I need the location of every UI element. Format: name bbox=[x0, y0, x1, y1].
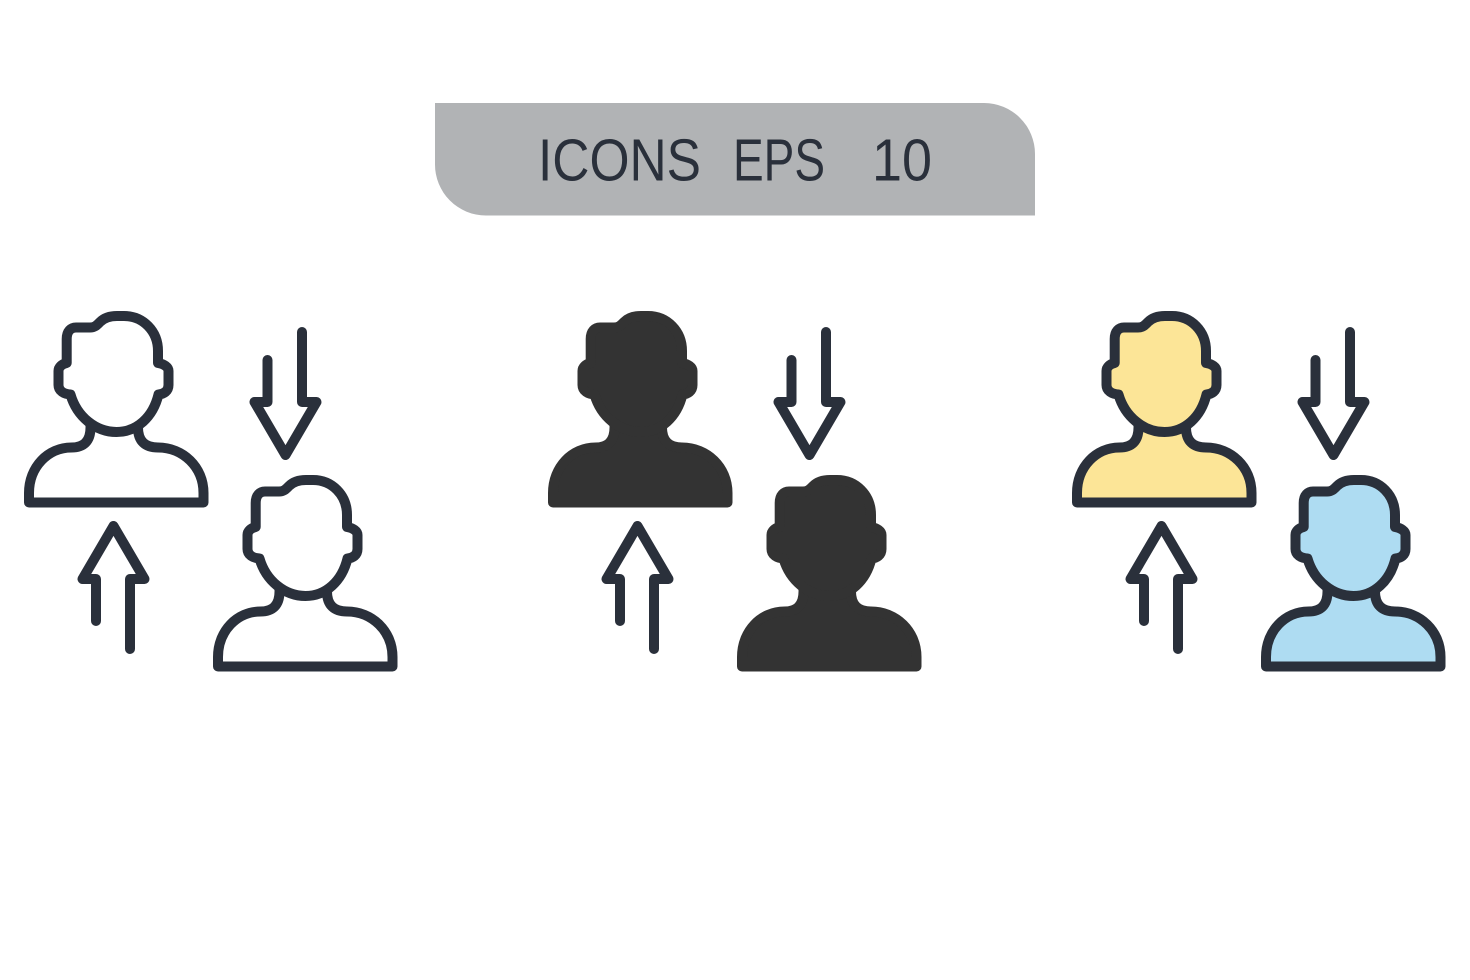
outline arrow up bbox=[82, 526, 144, 649]
outline arrow down bbox=[254, 332, 316, 455]
banner background bbox=[435, 103, 1035, 216]
icon: colour exchange bbox=[1077, 316, 1440, 666]
colour arrow down bbox=[1302, 332, 1364, 455]
icon: solid exchange bbox=[553, 316, 916, 666]
solid person left bbox=[553, 316, 728, 502]
blue person bbox=[1266, 480, 1440, 666]
solid arrow down bbox=[778, 332, 840, 455]
banner bbox=[435, 103, 1035, 216]
banner title bbox=[538, 128, 932, 194]
solid person right bbox=[742, 480, 916, 666]
outline person right bbox=[218, 480, 392, 666]
icon: outline exchange bbox=[29, 316, 392, 666]
banner title: ICONS bbox=[538, 128, 701, 194]
colour arrow up bbox=[1130, 526, 1192, 649]
yellow person bbox=[1077, 316, 1252, 502]
banner title: 10 bbox=[872, 128, 932, 194]
outline person left bbox=[29, 316, 204, 502]
banner title: EPS bbox=[733, 128, 825, 194]
solid arrow up bbox=[606, 526, 668, 649]
